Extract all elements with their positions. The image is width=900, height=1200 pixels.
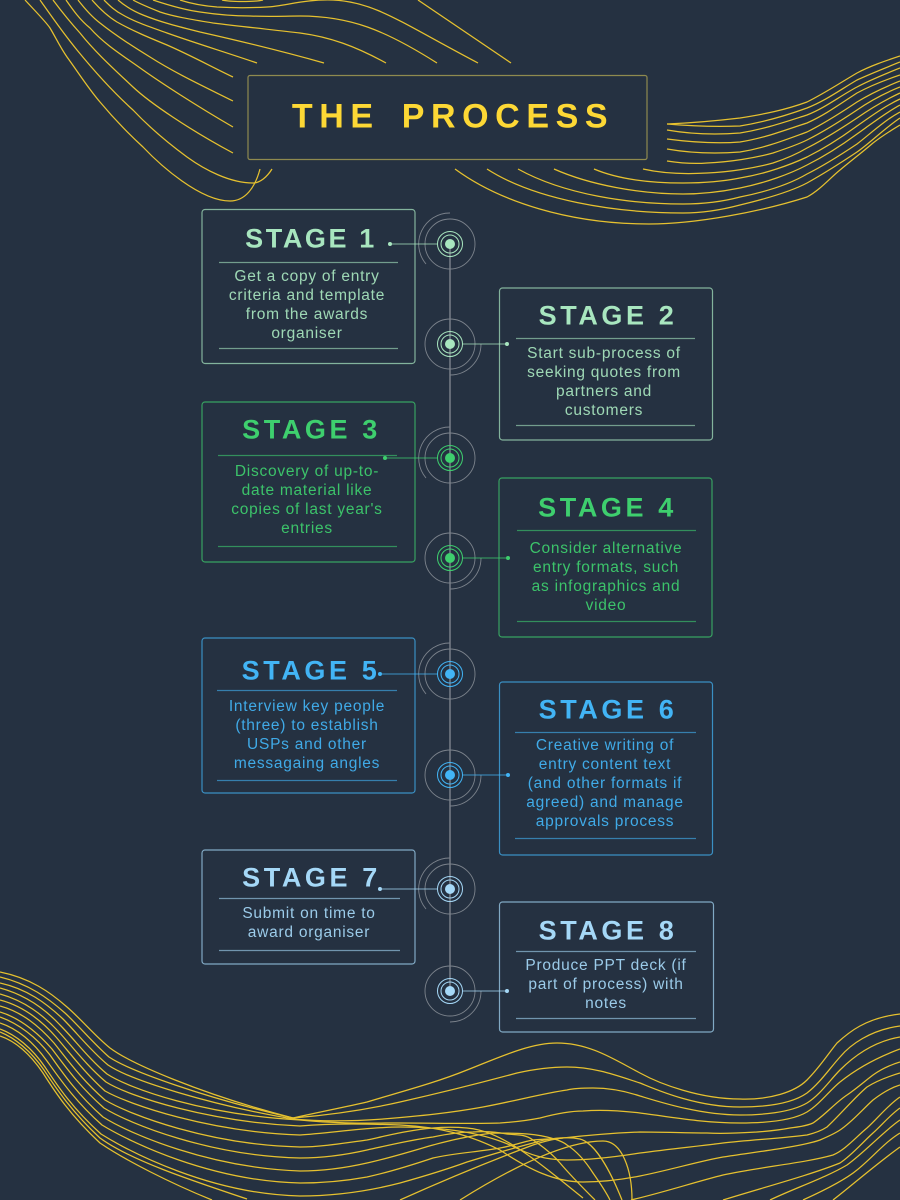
text: stage 6: Creative writing of	[536, 737, 674, 754]
timeline node 5	[378, 643, 475, 699]
text: stage 7: Submit on time to	[242, 905, 376, 922]
decorative waves: bottom	[0, 972, 900, 1200]
heading: stage 4: STAGE 4	[538, 492, 677, 522]
text: stage 7: award organiser	[248, 924, 370, 941]
text: stage 2: Start sub-process of	[527, 345, 681, 362]
text: stage 3: copies of last year's	[231, 501, 383, 518]
timeline node 6	[425, 750, 510, 806]
heading: stage 7: STAGE 7	[242, 862, 381, 892]
panel: stage 4	[499, 478, 712, 637]
text: stage 1: from the awards	[246, 306, 368, 323]
timeline node 3	[383, 427, 475, 483]
timeline node 7	[378, 858, 475, 914]
text: stage 2: partners and	[556, 383, 652, 400]
heading: stage 5: STAGE 5	[242, 656, 380, 686]
divider lines	[516, 338, 695, 426]
text: stage 8: part of process) with	[528, 976, 684, 993]
heading: stage 8: STAGE 8	[539, 916, 677, 946]
text: stage 3: Discovery of up-to-	[235, 463, 379, 480]
text: stage 3: entries	[281, 520, 333, 537]
panel: stage 5	[202, 638, 415, 793]
text: stage 6: agreed) and manage	[526, 794, 684, 811]
text: stage 4: video	[586, 597, 626, 614]
panel: stage 8	[500, 902, 714, 1032]
divider lines	[218, 456, 397, 546]
divider lines	[219, 262, 398, 348]
heading: stage 3: STAGE 3	[242, 414, 381, 444]
text: stage 4: Consider alternative	[530, 540, 682, 557]
heading: stage 1: STAGE 1	[245, 224, 377, 254]
text: stage 5: Interview key people	[229, 698, 385, 715]
heading: stage 6: STAGE 6	[539, 694, 677, 724]
divider lines	[516, 952, 696, 1018]
text: stage 5: messagaing angles	[234, 755, 380, 772]
timeline node 1	[388, 213, 475, 269]
text: stage 8: Produce PPT deck (if	[525, 957, 687, 974]
panel: stage 2	[500, 288, 712, 440]
heading: stage 2: STAGE 2	[539, 300, 677, 330]
text: stage 4: entry formats, such	[533, 559, 679, 576]
timeline node 2	[425, 319, 509, 375]
decorative waves: top left	[25, 0, 511, 201]
text: stage 6: approvals process	[536, 813, 674, 830]
panel: stage 6	[500, 682, 712, 855]
title: THE PROCESS	[292, 98, 614, 136]
text: stage 5: (three) to establish	[235, 717, 379, 734]
text: stage 6: entry content text	[539, 756, 671, 773]
text: stage 1: criteria and template	[229, 287, 385, 304]
text: stage 2: seeking quotes from	[527, 364, 681, 381]
text: stage 6: (and other formats if	[528, 775, 682, 792]
divider lines	[217, 690, 397, 780]
text: stage 1: organiser	[271, 325, 343, 342]
text: stage 4: as infographics and	[532, 578, 680, 595]
divider lines	[515, 732, 696, 838]
panel: stage 3	[202, 402, 415, 562]
panel: stage 1	[202, 210, 415, 364]
text: stage 3: date material like	[242, 482, 372, 499]
timeline node 8	[425, 966, 509, 1022]
text: stage 1: Get a copy of entry	[234, 268, 380, 285]
panel: stage 7	[202, 850, 415, 964]
timeline vertical line	[449, 244, 451, 991]
divider lines	[219, 898, 400, 950]
text: stage 5: USPs and other	[247, 736, 367, 753]
decorative waves: top right	[455, 56, 900, 224]
text: stage 8: notes	[585, 995, 627, 1012]
timeline node 4	[425, 533, 510, 589]
title panel	[248, 76, 647, 160]
text: stage 2: customers	[565, 402, 643, 419]
divider lines	[517, 530, 696, 622]
